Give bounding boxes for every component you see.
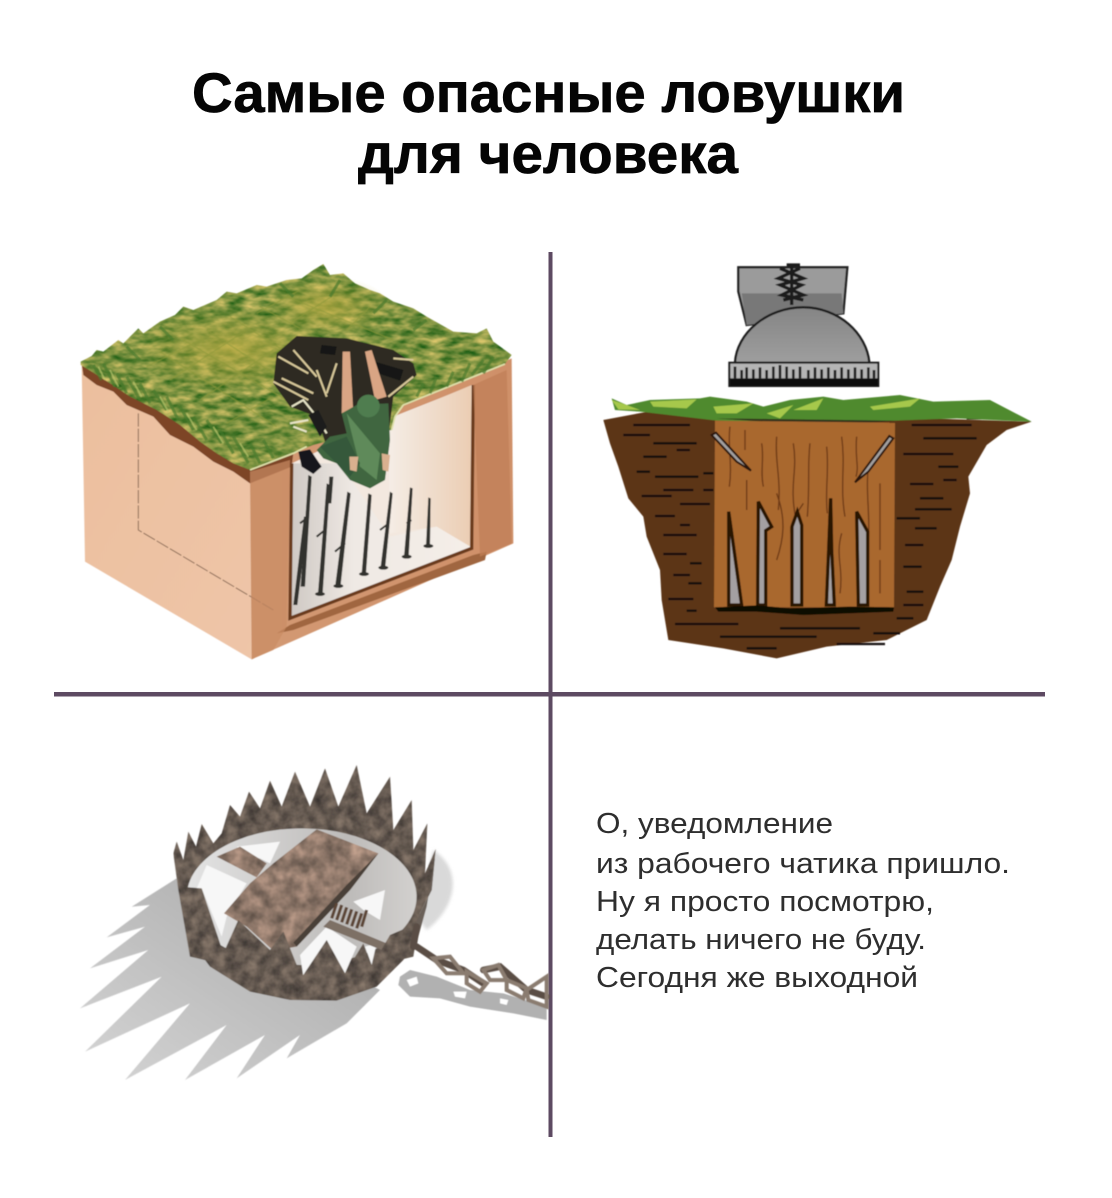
caption text: из рабочего чатика пришло. [596, 848, 1010, 880]
spikes [293, 475, 433, 605]
upper angled spikes [712, 433, 893, 482]
caption text: Ну я просто посмотрю, [596, 886, 934, 918]
soil band under grass [82, 363, 293, 483]
dashed outline on side [138, 413, 273, 610]
pit floor [715, 605, 894, 615]
caption text: О, уведомление [596, 808, 833, 840]
boot [729, 265, 878, 386]
caption text [596, 808, 1010, 994]
soil [603, 410, 1032, 658]
panel: spike pit with boot [603, 265, 1032, 658]
pit opening [250, 370, 512, 659]
panel: pit trap cross-section with soldier [81, 264, 513, 659]
back wall with teeth [173, 765, 436, 983]
interior floor [187, 828, 417, 965]
floor spikes [729, 498, 868, 605]
grid divider lines [54, 252, 1045, 1137]
spring [323, 903, 387, 950]
soldier [298, 345, 403, 488]
wood grain [729, 427, 880, 593]
trap hole [273, 336, 417, 450]
panel: bear trap [80, 765, 547, 1080]
front wall with teeth [180, 887, 418, 1001]
trap shadow [80, 850, 547, 1080]
grass top [81, 264, 512, 470]
grass strip [612, 395, 1032, 426]
caption text: делать ничего не буду. [596, 924, 926, 956]
right hoop edge [413, 857, 435, 937]
pit interior [714, 421, 895, 607]
title: для человека [358, 122, 739, 185]
caption text: Сегодня же выходной [596, 962, 918, 994]
block left face [82, 365, 252, 659]
title [192, 61, 905, 185]
block right face [250, 358, 513, 659]
small bar [217, 847, 267, 877]
pan plate [224, 829, 378, 951]
light gaps [192, 842, 385, 977]
title: Самые опасные ловушки [192, 61, 905, 124]
chain [413, 927, 547, 1007]
plate shade [293, 853, 378, 947]
